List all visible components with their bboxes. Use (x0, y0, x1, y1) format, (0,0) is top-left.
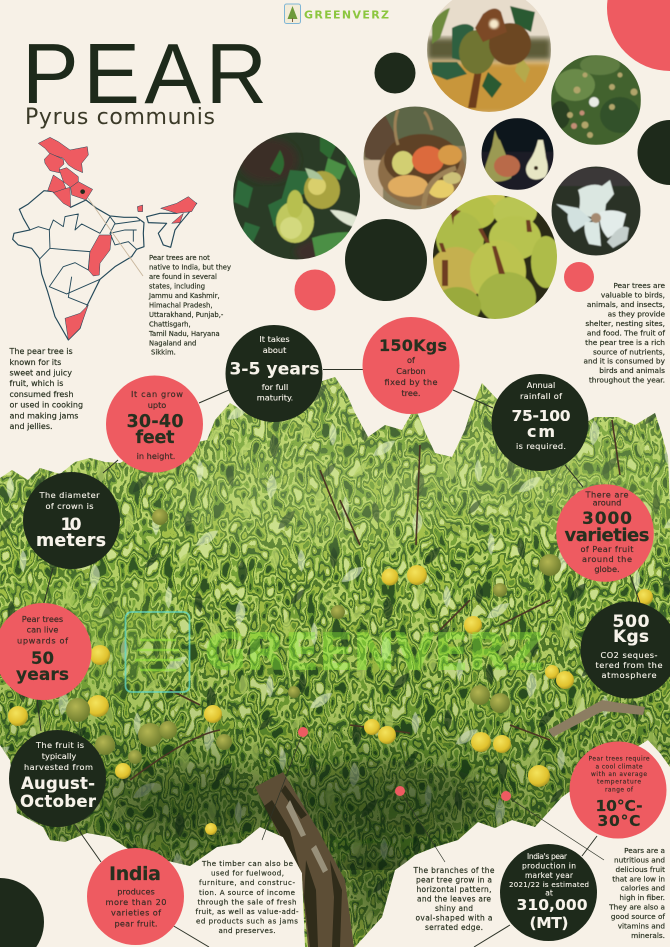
value: 310,000 MT: 310,000 (516, 896, 588, 914)
stat circle: height: in height. (137, 451, 175, 461)
text: timber: fruit, as well as value-add- (196, 907, 299, 916)
stat circle: maturity (226, 325, 322, 422)
text: nutrition: vitamins and (618, 921, 665, 930)
logo: GREENVERZ (304, 8, 389, 22)
text: pear tree description: sweet and juicy (10, 368, 72, 378)
stat circle: varieties: There are (584, 490, 628, 500)
text: native states: states, including (149, 282, 205, 290)
stat circle: production (500, 844, 597, 941)
stat circle: temperature (570, 742, 666, 838)
text: nutrition: delicious fruit (615, 865, 665, 874)
text: value to wildlife: as they provide (608, 310, 665, 318)
connector lines (37, 370, 640, 947)
map of India with highlighted states (13, 137, 197, 340)
text: pear tree description: or used in cooking (10, 401, 83, 410)
stat circle: CO2: tered from the (596, 660, 662, 670)
text: native states: Himachal Pradesh, (149, 302, 212, 310)
red marker dot (298, 727, 308, 737)
text: nutrition: nutritious and (614, 856, 665, 864)
text: native states: Nagaland and (149, 340, 196, 348)
text: branches: pear tree grow in a (416, 876, 492, 884)
text: native states (148, 254, 231, 356)
stat circle: varieties: around the (582, 554, 632, 564)
stat circle: carbon fixed: fixed by the (384, 377, 438, 387)
text: timber: through the sale of fresh (198, 897, 296, 906)
text: nutrition: minerals. (631, 931, 665, 940)
stat circle: varieties: varieties (564, 525, 650, 546)
text: value to wildlife: and it is consumed by (584, 357, 666, 366)
stat circle: harvest: typically (42, 751, 76, 761)
stat circle: varieties (556, 484, 654, 582)
text: pear tree description: fruit, which is (10, 379, 63, 388)
decorative circle: dark small (374, 52, 416, 94)
trunk (255, 772, 354, 947)
text: native states: Pear trees are not (149, 254, 210, 262)
stat circle: lifespan: can live (27, 624, 58, 634)
stat circle: CO2: atmosphere (602, 670, 656, 680)
stat circle: harvest: harvested from (24, 762, 93, 772)
text: nutrition: good source of (611, 912, 665, 921)
stat circle: temperature: temperature (597, 780, 641, 786)
stat circle: India (87, 848, 184, 945)
watermark: Greenverz: GREENVERZ (204, 623, 544, 683)
text: pear tree description: known for its (10, 358, 61, 367)
photo: two pears on black (481, 118, 554, 190)
value: August-October: August- (21, 774, 95, 793)
text: pear tree description: consumed fresh (10, 390, 74, 399)
stat circle: production: at (545, 888, 553, 898)
title: PEAR (22, 27, 267, 122)
red marker dot (395, 786, 405, 796)
text: value to wildlife: Pear trees are (613, 281, 665, 290)
photo: white pear blossom (551, 166, 641, 256)
stat circle: crown diameter: meters (36, 531, 106, 551)
photo: green pears close-up (433, 195, 557, 319)
text: timber: tion. A source of income (199, 888, 295, 897)
watermark: Greenverz (126, 612, 544, 692)
stat circle: carbon fixed: Carbon (396, 366, 426, 376)
text: native states: are found in several (149, 273, 217, 281)
stat circle: temperature: Pear trees require (588, 756, 650, 762)
text: branches: The branches of the (412, 866, 495, 875)
stat circle: carbon fixed: tree. (401, 388, 421, 398)
text: value to wildlife: shelter, nesting sites, (585, 319, 665, 328)
photo: basket of pears (363, 106, 467, 212)
decorative circle: top right red (607, 0, 670, 71)
value: 150Kgs: 150Kgs (379, 336, 447, 355)
text: pear tree description: and jellies. (10, 422, 53, 431)
text: value to wildlife: throughout the year. (589, 375, 665, 384)
value: India: India (109, 863, 161, 885)
text: branches: and the leaves are (417, 894, 491, 904)
text: nutrition: Pears are a (624, 846, 665, 855)
text: branches: horizontal pattern, (416, 885, 492, 894)
stat circle: maturity: maturity. (257, 392, 293, 402)
value: 75-100 cm: 75-100 (512, 407, 571, 425)
text: nutrition: that are low in (612, 874, 665, 883)
text: timber: and preserves. (218, 926, 276, 935)
value: 10-30 C: 10°C- (596, 797, 642, 815)
stat circle: CO2: Kgs (613, 627, 649, 647)
stat circle: harvest (9, 730, 106, 827)
stat circle: production: production in (522, 862, 576, 870)
text: native states: Sikkim. (151, 348, 176, 356)
stat circle: rainfall: Annual (527, 380, 555, 390)
text: nutrition (608, 846, 665, 940)
stat circle: carbon fixed (362, 317, 460, 414)
stat circle: rainfall: is required. (516, 441, 566, 451)
text: branches: oval-shaped with a (416, 914, 492, 922)
stat circle: harvest: The fruit is (35, 740, 84, 750)
stat circle: production: (MT) (530, 914, 568, 932)
text: native states: Uttarakhand, Punjab,- (149, 311, 224, 319)
text: value to wildlife: valuable to birds, (601, 290, 665, 300)
stat circle: crown diameter: The diameter (38, 490, 100, 500)
stat circle: lifespan: Pear trees (22, 614, 63, 624)
stat circle: production: market year (525, 871, 574, 880)
text: value to wildlife (584, 281, 666, 384)
stat circle: lifespan: upwards of (17, 636, 69, 646)
decorative circle: red mid (294, 270, 336, 310)
pointer line from map to text (88, 198, 143, 276)
text: nutrition: calories and (621, 884, 665, 893)
stat circle: production: 2021/22 is estimated (509, 881, 589, 889)
text: pear tree description: The pear tree is (8, 347, 73, 356)
stat circle: lifespan (0, 603, 92, 700)
text: value to wildlife: and food. The fruit of (587, 328, 665, 338)
decorative circle: dark large (345, 219, 427, 301)
decorative circle: red small right (564, 262, 594, 292)
illustration: pear tree canopy and trunk (0, 370, 670, 947)
stat circle: India: more than 20 (106, 897, 166, 907)
text: nutrition: high in fiber. (619, 893, 665, 902)
text: timber (196, 859, 299, 935)
text: native states: native to India, but they (149, 264, 231, 272)
text: pear tree description (8, 347, 83, 431)
text: timber: The timber can also be (201, 859, 293, 868)
stat circle: temperature: a cool climate (596, 764, 643, 770)
decorative circle: dark right (638, 120, 670, 185)
text: native states: Tamil Nadu, Haryana (148, 330, 220, 338)
text: pear tree description: and making jams (10, 412, 78, 420)
value: 500 Kgs: 500 (612, 612, 650, 632)
stat circle: height: It can grow (131, 389, 183, 399)
stat circle: harvest: October (20, 792, 97, 811)
photo: tree full of pears (550, 55, 641, 145)
text: branches: serrated edge. (425, 923, 483, 932)
text: value to wildlife: source of nutrients, (593, 347, 665, 356)
decorative circle: bottom left dark (0, 878, 44, 947)
text: value to wildlife: animals, and insects, (587, 300, 665, 309)
stat circle: maturity: about (263, 345, 287, 355)
text: timber: ed products such as jams (196, 917, 298, 926)
pears on the tree (8, 509, 653, 835)
value: 3-5 years: 3-5 years (230, 360, 320, 380)
stat circle: height: upto (148, 400, 166, 410)
stat circle: varieties: globe. (594, 564, 620, 574)
text: native states: Chattisgarh, (149, 320, 191, 328)
text: branches (412, 866, 495, 932)
stat circle: maturity: It takes (259, 334, 290, 344)
red marker dot (501, 791, 511, 801)
stat circle: India: pear fruit. (114, 918, 158, 928)
stat circle: CO2: CO2 seques- (600, 650, 658, 660)
stat circle: height: feet (136, 428, 174, 448)
stat circle: lifespan: years (16, 665, 69, 685)
stat circle: production: India's pear (527, 852, 568, 861)
text: branches: shiny and (435, 904, 473, 913)
subtitle: Pyrus communis (25, 105, 215, 130)
text: value to wildlife: birds and animals (599, 366, 665, 375)
stat circle: maturity: for full (262, 382, 288, 392)
value: 30-40 feet: 30-40 (126, 412, 184, 432)
logo (284, 4, 389, 24)
value: 3000 varieties: 3000 (582, 509, 632, 529)
photo: pears on branch with leaves (233, 132, 360, 260)
stat circle: rainfall (492, 374, 588, 471)
stat circle: crown diameter: of crown is (46, 501, 94, 511)
stat circle: carbon fixed: of (407, 355, 416, 365)
value: 50 years: 50 (31, 649, 54, 668)
stat circle: varieties: of Pear fruit (580, 544, 634, 554)
text: value to wildlife: the pear tree is a rich (585, 338, 665, 347)
stat circle: India: varieties of (111, 908, 162, 918)
value: 10 meters: 10 (60, 515, 82, 535)
stat circle: height (106, 376, 203, 472)
stat circle: temperature: with an average (591, 772, 647, 778)
stat circle: crown diameter (23, 472, 120, 569)
text: nutrition: They are also a (608, 902, 665, 912)
stat circle: rainfall: rainfall of (520, 391, 563, 401)
stat circle: temperature: range of (605, 788, 634, 794)
photo: two pears backlit (427, 0, 551, 114)
stat circle: India: produces (117, 886, 155, 896)
text: timber: used for fuelwood, (211, 869, 284, 878)
stat circle: varieties: around (593, 498, 621, 508)
text: native states: Jammu and Kashmir, (148, 292, 220, 300)
stat circle: temperature: 30°C (598, 812, 640, 830)
stat circle: CO2 (580, 602, 670, 698)
stat circle: rainfall: cm (527, 422, 555, 441)
text: timber: furniture, and construc- (199, 878, 295, 887)
